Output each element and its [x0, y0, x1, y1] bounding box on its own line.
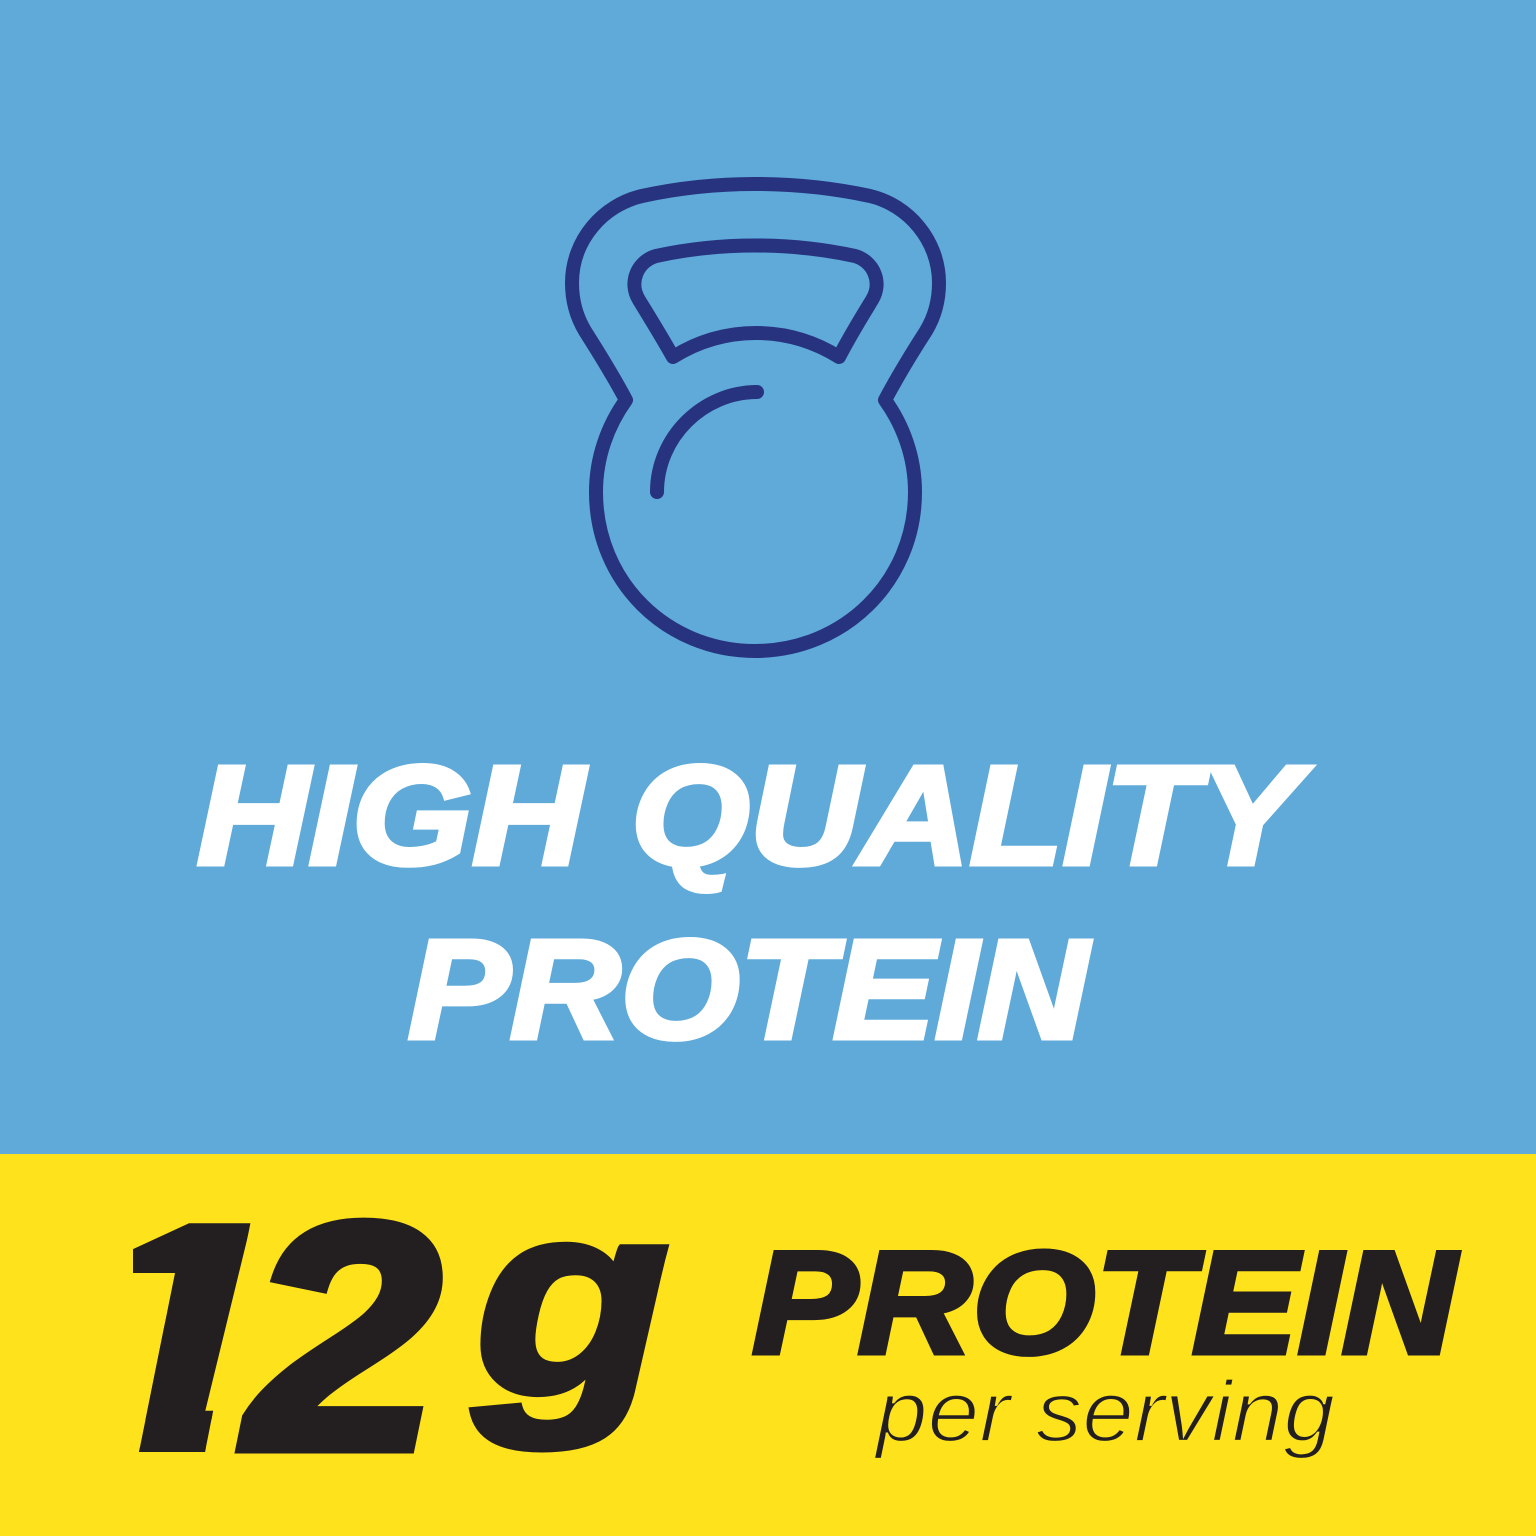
- label: per serving: per serving: [873, 1364, 1335, 1460]
- icon: kettlebell: [572, 184, 939, 651]
- panel: yellow footer band: [0, 1154, 1536, 1536]
- amount: 12 g: g: [470, 1146, 669, 1452]
- heading: high quality protein: QUALITY: [631, 736, 1312, 894]
- heading: high quality protein: PROTEIN: [408, 910, 1091, 1068]
- label: protein: PROTEIN: [752, 1221, 1459, 1384]
- amount: 12 g: 1: [58, 1158, 285, 1522]
- heading: high quality protein: [197, 736, 1312, 1068]
- amount: 12 g: [133, 1218, 670, 1454]
- amount: 12 g: 2: [242, 1158, 440, 1517]
- panel: blue background: [0, 0, 1536, 1154]
- heading: high quality protein: HIGH: [197, 736, 587, 894]
